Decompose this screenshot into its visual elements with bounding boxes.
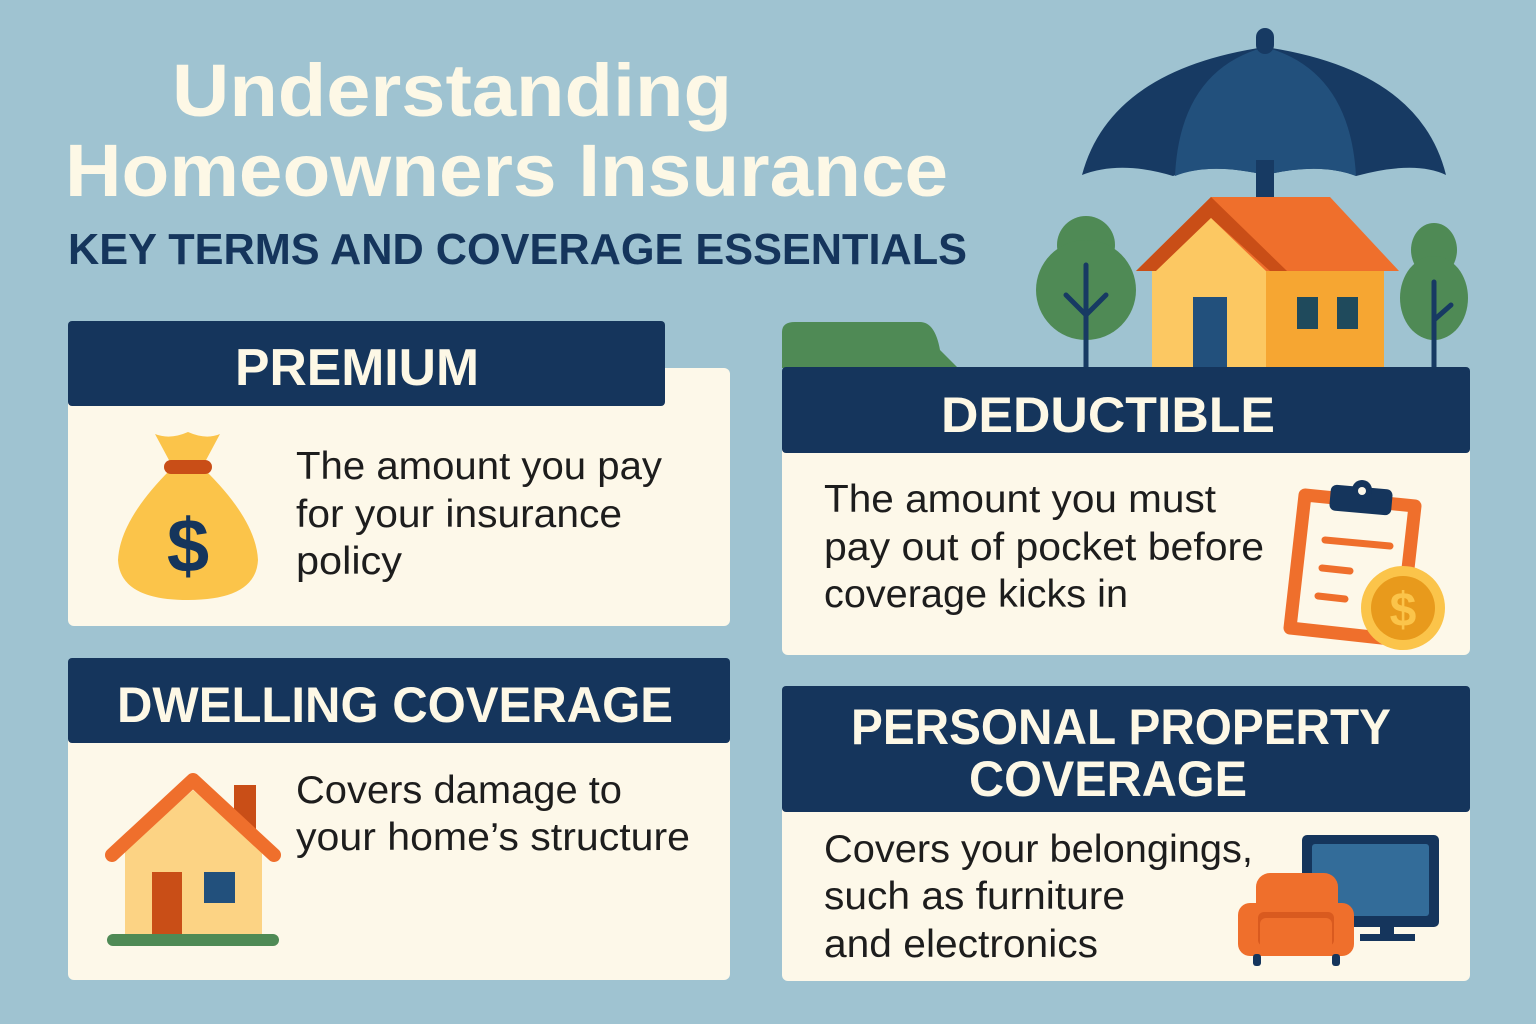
icon: money bag: $ <box>167 504 209 589</box>
text: premium: The amount you pay <box>296 445 663 488</box>
text: premium: for your insurance <box>296 493 622 536</box>
subtitle: KEY TERMS AND COVERAGE ESSENTIALS <box>68 225 967 274</box>
illustration: umbrella over house <box>1036 28 1468 368</box>
text: personal property: and electronics <box>824 923 1098 966</box>
text: deductible: pay out of pocket before <box>824 526 1264 569</box>
panel: dwelling coverage <box>68 658 730 980</box>
icon: tv and armchair <box>1238 835 1439 966</box>
icon: clipboard with coin: $ <box>1390 584 1417 637</box>
text: dwelling: Covers damage to <box>296 769 622 812</box>
title <box>65 49 948 212</box>
text: deductible: The amount you must <box>824 478 1216 521</box>
text: deductible: coverage kicks in <box>824 573 1128 616</box>
heading: personal property: PERSONAL PROPERTY <box>851 699 1391 755</box>
text: premium: policy <box>296 540 403 583</box>
panel: deductible <box>782 367 1470 655</box>
heading: dwelling: DWELLING COVERAGE <box>117 677 673 733</box>
title: Understanding <box>172 49 732 132</box>
panel: premium <box>68 321 730 626</box>
text: dwelling: your home’s structure <box>296 816 690 859</box>
icon: clipboard with coin <box>1290 480 1445 650</box>
icon: money bag <box>118 432 258 600</box>
panel: personal property coverage <box>782 686 1470 981</box>
title: Homeowners Insurance <box>65 129 948 212</box>
heading: premium: PREMIUM <box>235 339 479 397</box>
icon: house <box>107 780 279 946</box>
heading: personal property: COVERAGE <box>969 751 1247 807</box>
hill <box>782 322 958 368</box>
text: personal property: such as furniture <box>824 875 1125 918</box>
text: personal property: Covers your belongings, <box>824 828 1253 871</box>
heading: deductible: DEDUCTIBLE <box>941 387 1275 443</box>
